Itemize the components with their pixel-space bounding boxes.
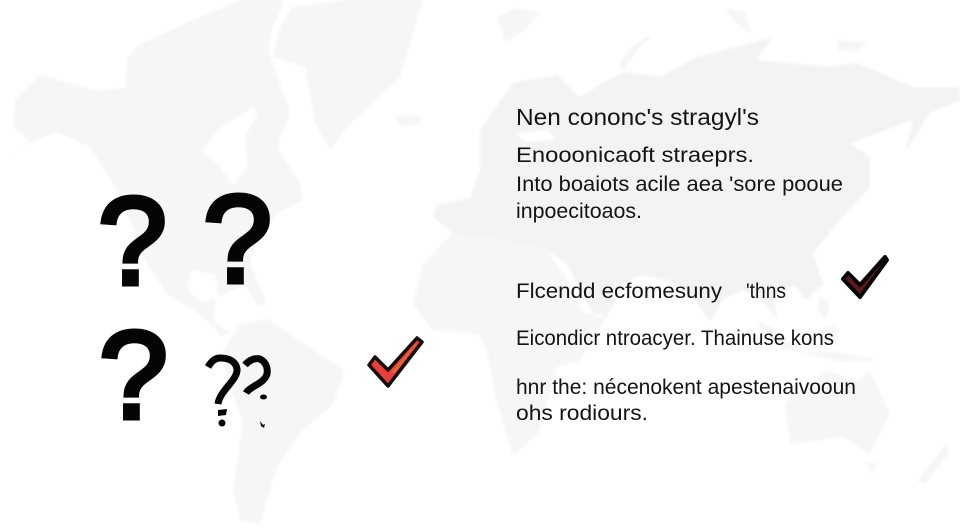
heading: Nen cononc's stragyl's <box>516 104 759 130</box>
icon: red check mark <box>369 338 422 386</box>
text block: first strategy <box>516 143 843 223</box>
text block: first strategy: Enooonicaoft straeprs. <box>516 143 754 167</box>
text block: fourth strategy: hnr the: nécenokent apestenaivooun <box>516 376 856 399</box>
text line: second strategy: 'thns <box>746 280 786 303</box>
text block: fourth strategy: ohs rodiours. <box>516 402 648 425</box>
text line: third strategy: Eicondicr ntroacyer. Thainuse kons <box>516 327 834 350</box>
text block: first strategy: Into boaiots acile aea 'sore pooue <box>516 173 843 196</box>
text line: second strategy: Flcendd ecfomesuny <box>516 280 723 303</box>
text block: fourth strategy <box>516 376 856 425</box>
icon: dark check mark <box>843 257 887 297</box>
text block: first strategy: inpoecitoaos. <box>516 200 642 223</box>
distorted question marks <box>208 358 267 428</box>
question mark bottom left: ? <box>99 307 168 445</box>
white map cuts <box>188 107 555 302</box>
question mark top right: ? <box>203 171 272 309</box>
question mark top left: ? <box>98 173 167 311</box>
